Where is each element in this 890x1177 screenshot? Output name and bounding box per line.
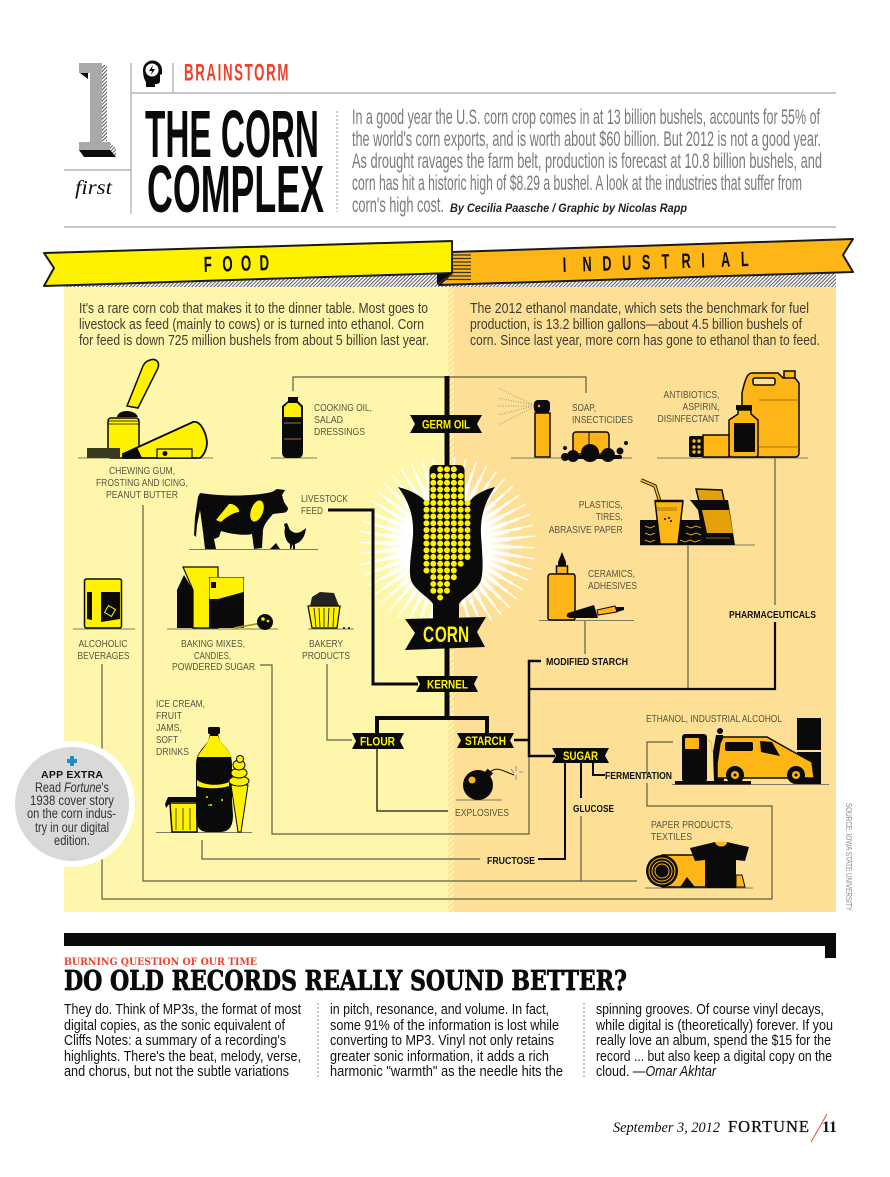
icon: bomb	[456, 766, 523, 800]
label: baking mixes: POWDERED SUGAR	[172, 661, 255, 673]
label: chewing gum: FROSTING AND ICING,	[96, 477, 188, 489]
label: alcoholic beverages: BEVERAGES	[78, 650, 130, 662]
column 1 text: digital copies, as the sonic equivalent of	[64, 1017, 286, 1034]
icon: paper roll and t-shirt	[645, 842, 753, 888]
label: chewing gum	[96, 465, 188, 501]
label: cooking oil: COOKING OIL,	[314, 402, 372, 414]
callout: app extra: on the corn indus-	[27, 806, 116, 821]
icon: cup, tray, sandpaper	[640, 480, 755, 545]
industrial intro text	[470, 301, 820, 349]
icon: peanut butter jar and gum	[78, 359, 213, 458]
food intro text: livestock as feed (mainly to cows) or is turned into ethanol. Corn	[79, 317, 424, 333]
intro text: corn's high cost.	[352, 193, 444, 217]
column 3 text: really love an album, spend the $15 for the	[596, 1032, 831, 1049]
label: bakery products: PRODUCTS	[302, 650, 350, 662]
page footer: 11	[822, 1119, 837, 1136]
sugar ribbon: SUGAR	[563, 751, 599, 763]
corn ribbon: CORN	[423, 623, 469, 648]
icon: blue plus	[67, 756, 77, 766]
label: cooking oil	[314, 402, 372, 438]
icon: cooking oil bottle	[271, 397, 317, 458]
page footer	[613, 1114, 837, 1142]
label: soap, insecticides: SOAP,	[572, 402, 596, 414]
column 2 text: converting to MP3. Vinyl not only retains	[330, 1032, 554, 1049]
label: livestock feed: FEED	[301, 505, 323, 517]
label: antibiotics: ANTIBIOTICS,	[664, 389, 720, 401]
food intro text	[79, 301, 429, 349]
label: baking mixes: CANDIES,	[194, 650, 231, 662]
germ oil ribbon	[410, 415, 482, 433]
kernel ribbon	[416, 676, 478, 692]
food intro text: for feed is down 725 million bushels from about 5 billion last year.	[79, 333, 429, 349]
label: plastics: ABRASIVE PAPER	[549, 524, 623, 536]
black footer rule	[64, 933, 836, 958]
label: ice cream: FRUIT	[156, 710, 182, 722]
label: chewing gum: PEANUT BUTTER	[106, 489, 178, 501]
icon: soap and bubbles	[511, 432, 632, 462]
label: soap, insecticides	[572, 402, 633, 426]
label: livestock feed: LIVESTOCK	[301, 493, 348, 505]
headline: DO OLD RECORDS REALLY SOUND BETTER?	[64, 966, 627, 997]
corn ribbon	[405, 617, 486, 650]
label: antibiotics: ASPIRIN,	[682, 401, 720, 413]
label: alcoholic beverages: ALCOHOLIC	[78, 638, 128, 650]
column 2 text: some 91% of the information is lost while	[330, 1017, 559, 1034]
title: COMPLEX	[147, 152, 324, 227]
corn illustration	[398, 465, 495, 620]
label: ice cream	[156, 698, 205, 758]
section label: BRAINSTORM	[184, 60, 290, 86]
callout: app extra: try in our digital	[35, 820, 109, 835]
label: soap, insecticides: INSECTICIDES	[572, 414, 633, 426]
numeral 1	[79, 63, 116, 157]
callout: app extra: edition.	[54, 833, 90, 848]
cob top	[430, 465, 464, 505]
starch ribbon: STARCH	[465, 736, 506, 748]
callout: app extra	[9, 741, 135, 867]
sugar ribbon	[552, 748, 609, 763]
column 3 text: spinning grooves. Of course vinyl decays,	[596, 1001, 824, 1018]
column 1 text: Cliffs Notes: a summary of a recording's	[64, 1032, 286, 1049]
label: plastics: TIRES,	[596, 511, 623, 523]
icon: jug, medicine bottle, pills	[657, 371, 808, 458]
header rules	[64, 63, 836, 227]
label: chewing gum: CHEWING GUM,	[109, 465, 175, 477]
column 3 text: cloud. —Omar Akhtar	[596, 1063, 717, 1080]
page footer: FORTUNE	[728, 1117, 810, 1136]
label: ceramics: CERAMICS,	[588, 568, 635, 580]
label: antibiotics	[658, 389, 720, 425]
industrial intro text: production, is 13.2 billion gallons—about 4.5 billion bushels of	[470, 317, 803, 333]
industrial intro text: The 2012 ethanol mandate, which sets the benchmark for fuel	[470, 301, 809, 317]
column dividers	[318, 1003, 584, 1078]
column 2 text: greater sonic information, it adds a rich	[330, 1048, 549, 1065]
banner: industrial	[439, 239, 853, 285]
icon: cupcake	[308, 592, 354, 629]
column 2 text: in pitch, resonance, and volume. In fact,	[330, 1001, 549, 1018]
label: alcoholic beverages	[78, 638, 130, 662]
label: explosives: EXPLOSIVES	[455, 807, 509, 819]
column 3 text	[595, 1001, 833, 1080]
label: ice cream: DRINKS	[156, 746, 189, 758]
label: baking mixes	[172, 638, 255, 673]
sunburst behind corn	[365, 463, 529, 627]
intro text	[352, 105, 822, 217]
kicker: BURNING QUESTION OF OUR TIME	[64, 956, 257, 968]
label: livestock feed	[301, 493, 348, 517]
column 1 text: and chorus, but not the subtle variations	[64, 1063, 289, 1080]
column 3 text: while digital is (theoretically) forever. If you	[595, 1017, 833, 1034]
label: bakery products: BAKERY	[309, 638, 343, 650]
label: ice cream: SOFT	[156, 734, 178, 746]
label: ethanol: ETHANOL, INDUSTRIAL ALCOHOL	[646, 713, 782, 725]
label: baking mixes: BAKING MIXES,	[181, 638, 245, 650]
label: plastics	[549, 499, 623, 536]
icon: baking boxes and lollipop	[167, 567, 278, 630]
callout: app extra: Read Fortune's	[35, 780, 109, 795]
starch ribbon	[457, 733, 514, 748]
flour ribbon: FLOUR	[360, 736, 396, 748]
column 1 text: highlights. There's the beat, melody, verse,	[64, 1048, 301, 1065]
icon: cow and chicken	[189, 489, 318, 550]
first label: first	[75, 177, 112, 199]
flow lines: thick spine and branches	[328, 376, 775, 859]
label: cooking oil: SALAD	[314, 414, 343, 426]
label: paper products: PAPER PRODUCTS,	[651, 819, 733, 831]
label: ceramics	[588, 568, 637, 592]
germ oil ribbon: GERM OIL	[422, 420, 470, 432]
label: cooking oil: DRESSINGS	[314, 426, 365, 438]
flow lines: thin connectors	[102, 377, 775, 899]
title: THE CORN	[145, 97, 319, 172]
hatched shadow band	[64, 271, 836, 287]
hatched divider strip	[448, 287, 454, 912]
kernels	[426, 469, 468, 598]
kernel ribbon: KERNEL	[427, 680, 468, 692]
label: pharmaceuticals: PHARMACEUTICALS	[729, 609, 816, 621]
intro text: By Cecilia Paasche / Graphic by Nicolas Rapp	[450, 201, 687, 215]
source credit: SOURCE: IOWA STATE UNIVERSITY	[844, 803, 853, 912]
flour ribbon	[352, 733, 404, 749]
icon: alcoholic beverage glass	[73, 579, 135, 629]
label: bakery products	[302, 638, 350, 662]
label: fermentation: FERMENTATION	[605, 770, 672, 782]
husk	[398, 487, 495, 620]
column 2 text: harmonic "warmth" as the needle hits the	[330, 1063, 563, 1080]
label: ice cream: ICE CREAM,	[156, 698, 205, 710]
label: ice cream: JAMS,	[156, 722, 182, 734]
panel: industrial background	[448, 287, 836, 912]
banner: food	[44, 241, 452, 286]
icon: soda bottle, jam jar, ice cream	[156, 727, 252, 832]
icon: brain head	[143, 60, 162, 87]
label: paper products: TEXTILES	[651, 831, 692, 843]
icon: glue bottle and spark plug	[539, 552, 634, 620]
label: paper products	[651, 819, 733, 843]
banner: industrial: INDUSTRIAL	[562, 247, 749, 277]
column 2 text	[330, 1001, 563, 1080]
label: fructose: FRUCTOSE	[487, 855, 535, 867]
page footer: September 3, 2012	[613, 1120, 720, 1136]
column 1 text: They do. Think of MP3s, the format of most	[64, 1001, 302, 1018]
label: modified starch: MODIFIED STARCH	[546, 656, 628, 668]
panel: food background	[64, 287, 448, 912]
column 3 text: record ... but also keep a digital copy on the	[596, 1048, 832, 1065]
callout: app extra: 1938 cover story	[30, 793, 114, 808]
column 1 text	[64, 1001, 302, 1080]
label: glucose: GLUCOSE	[573, 803, 614, 815]
icon: pump, person, car, barrels	[672, 718, 829, 784]
callout: app extra: APP EXTRA	[41, 769, 103, 781]
label: ceramics: ADHESIVES	[588, 580, 637, 592]
label: plastics: PLASTICS,	[579, 499, 623, 511]
icon: spray can	[498, 388, 550, 457]
banner: food: FOOD	[203, 251, 269, 277]
industrial intro text: corn. Since last year, more corn has gone to ethanol than to feed.	[470, 333, 820, 349]
food intro text: It's a rare corn cob that makes it to the dinner table. Most goes to	[79, 301, 428, 317]
title	[145, 97, 324, 227]
label: antibiotics: DISINFECTANT	[658, 413, 720, 425]
